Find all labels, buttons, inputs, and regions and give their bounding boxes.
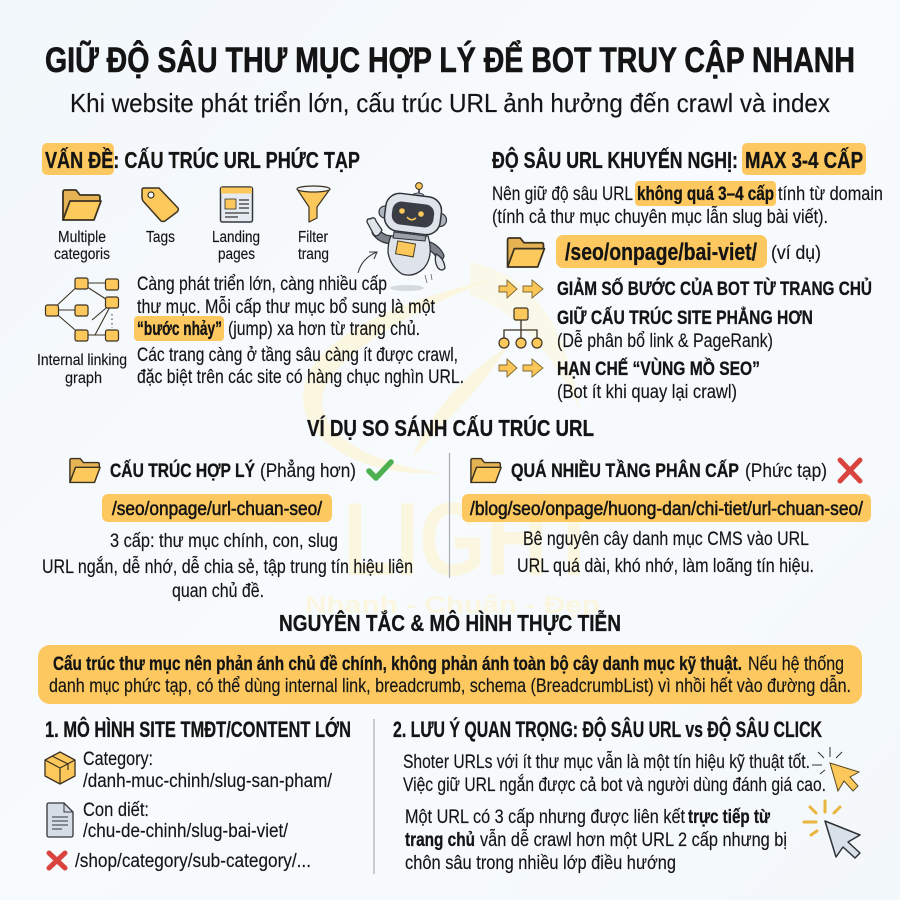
icon: folder good: [70, 459, 100, 482]
URL pill: bad: /blog/seo/onpage/huong-dan/chi-tiet/url-chuan-seo/: [470, 499, 864, 520]
text block: explanation: đặc biệt trên các site có hàng chục nghìn URL.: [137, 367, 464, 388]
URL pill: example: /seo/onpage/bai-viet/: [565, 239, 757, 266]
panel: mô hình site: [45, 717, 351, 872]
icon: cross: [49, 853, 65, 868]
watermark logo: [303, 262, 600, 619]
text: con diết: Con diết:: [83, 800, 149, 821]
label: tags: Tags: [146, 229, 175, 246]
text block: recommendation: (tính cả thư mục chuyên mục lẫn slug bài viết).: [492, 206, 828, 228]
text: con diết: /chu-de-chinh/slug-bai-viet/: [83, 821, 289, 842]
text block: good description: [42, 531, 413, 602]
heading: độ sâu: MAX 3-4 CẤP: [745, 146, 863, 173]
callout: principle: Nếu hệ thống: [748, 654, 844, 675]
text block: explanation: (jump) xa hơn từ trang chủ.: [228, 319, 420, 340]
heading: quá nhiều tầng phân cấp: QUÁ NHIỀU TẦNG PHÂN CẤP: [511, 460, 739, 482]
callout: principle: Cấu trúc thư mục nên phản ánh chủ đề chính, không phản ánh toàn bộ cây danh mục kỹ thuật.: [53, 654, 742, 675]
text: category: Category:: [83, 749, 153, 770]
icon: funnel: [297, 186, 330, 222]
text block: good description: 3 cấp: thư mục chính, con, slug: [110, 531, 338, 552]
icon: robot: [367, 183, 446, 291]
heading: độ sâu: [492, 143, 866, 175]
heading: vấn đề: [42, 143, 360, 175]
text block: bad description: [517, 529, 814, 577]
label: filter trang: Filter: [298, 229, 329, 246]
heading: nguyên tắc: NGUYÊN TẮC & MÔ HÌNH THỰC TIỄN: [279, 608, 621, 636]
text block: recommendation: tính từ domain: [778, 184, 883, 205]
heading: cấu trúc hợp lý: (Phẳng hơn): [260, 460, 356, 482]
URL pill: good: [102, 494, 332, 522]
panel: độ sâu URL khuyến nghị: [492, 143, 883, 403]
benefit 3: [557, 356, 760, 403]
text block: recommendation: Nên giữ độ sâu URL: [492, 184, 633, 205]
text block: click depth: chôn sâu trong nhiều lớp điều hướng: [405, 853, 676, 874]
text block: click depth: [405, 807, 787, 874]
label: internal linking graph: [37, 352, 127, 387]
heading: quá nhiều tầng phân cấp: (Phức tạp): [745, 461, 827, 482]
icon: document: [47, 803, 73, 837]
text block: shorter urls: Shoter URLs với ít thư mục vẫn là một tín hiệu kỹ thuật tốt.: [403, 751, 810, 773]
label: internal linking graph: graph: [65, 370, 102, 387]
label: filter trang: trang: [298, 246, 329, 263]
benefit 3: HẠN CHẾ “VÙNG MỒ SEO”: [557, 356, 760, 380]
label: multiple categoris: [54, 229, 110, 263]
text block: explanation: Càng phát triển lớn, càng nhiều cấp: [137, 274, 387, 295]
icon: arrows 2: [499, 359, 543, 377]
chart: internal linking graph: [46, 278, 118, 341]
text block: bad description: URL quá dài, khó nhớ, làm loãng tín hiệu.: [517, 556, 814, 577]
text: category: [83, 749, 333, 792]
text block: good description: URL ngắn, dễ nhớ, dễ chia sẻ, tập trung tín hiệu liên: [42, 556, 413, 578]
icon: folder bad: [471, 459, 501, 482]
URL pill: good: /seo/onpage/url-chuan-seo/: [112, 499, 323, 520]
text: category: /danh-muc-chinh/slug-san-pham/: [83, 771, 333, 792]
icon: arrows 1: [499, 280, 543, 298]
arrow: to robot: [358, 252, 377, 273]
icon: folder example: [508, 238, 544, 267]
icon: box: [45, 752, 75, 784]
panel: vấn đề: [37, 143, 464, 388]
text block: explanation: thư mục. Mỗi cấp thư mục bổ sung là một: [137, 296, 436, 318]
icon: tag: [142, 188, 178, 222]
text block: explanation: “bước nhảy”: [137, 319, 222, 340]
watermark logo: LIGHT: [343, 482, 600, 598]
label: landing pages: [212, 229, 260, 263]
URL pill: bad: [462, 494, 871, 522]
text block: explanation: Các trang càng ở tầng sâu càng ít được crawl,: [137, 345, 458, 366]
heading: vấn đề: VẤN ĐỀ: CẤU TRÚC URL PHỨC TẠP: [45, 146, 360, 173]
heading: cấu trúc hợp lý: [110, 460, 356, 482]
label: ví dụ: (ví dụ): [771, 243, 821, 264]
icon: hierarchy: [499, 308, 542, 348]
label: multiple categoris: categoris: [54, 246, 110, 263]
text block: explanation: [134, 274, 464, 388]
heading: so sánh: VÍ DỤ SO SÁNH CẤU TRÚC URL: [307, 414, 594, 441]
text block: recommendation: [492, 181, 883, 228]
icon: yellow cursor: [812, 747, 859, 791]
text block: bad description: Bê nguyên cây danh mục CMS vào URL: [523, 529, 809, 550]
label: landing pages: Landing: [212, 229, 260, 246]
label: multiple categoris: Multiple: [58, 229, 106, 246]
text block: click depth: trang chủ: [405, 830, 475, 851]
benefit 2: GIỮ CẤU TRÚC SITE PHẲNG HƠN: [557, 305, 813, 329]
heading: cấu trúc hợp lý: CẤU TRÚC HỢP LÝ: [110, 460, 255, 482]
text block: good description: quan chủ đề.: [172, 581, 264, 602]
subtitle: Khi website phát triển lớn, cấu trúc URL ảnh hưởng đến crawl và index: [70, 88, 830, 118]
icon: landing page: [220, 187, 252, 222]
text block: click depth: trực tiếp từ: [688, 807, 770, 828]
callout: principle: [38, 645, 862, 704]
label: internal linking graph: Internal linking: [37, 352, 127, 369]
icon: check: [369, 462, 391, 478]
label: landing pages: pages: [218, 246, 255, 263]
benefit 2: [557, 305, 813, 352]
text block: recommendation: không quá 3–4 cấp: [637, 184, 774, 205]
URL pill: example: [556, 235, 767, 268]
icon: cross: [840, 460, 860, 481]
icon: folder multiple categories: [63, 190, 101, 220]
panel: cấu trúc hợp lý: [42, 459, 413, 602]
icon: grey cursor: [804, 801, 860, 858]
text block: shorter urls: [403, 751, 826, 796]
label: filter trang: [298, 229, 329, 263]
benefit 3: (Bot ít khi quay lại crawl): [557, 382, 737, 403]
panel: lưu ý quan trọng: [393, 717, 860, 874]
text: con diết: [83, 800, 289, 842]
watermark logo: Nhanh - Chuẩn - Đẹp: [305, 592, 600, 619]
panel: quá nhiều tầng: [462, 459, 871, 577]
heading: độ sâu: ĐỘ SÂU URL KHUYẾN NGHỊ:: [492, 146, 738, 173]
text block: click depth: Một URL có 3 cấp nhưng được liên kết: [405, 807, 686, 828]
text: bad url: /shop/category/sub-category/...: [75, 851, 311, 872]
benefit 2: (Dễ phân bổ link & PageRank): [557, 330, 773, 352]
text block: click depth: vẫn dễ crawl hơn một URL 2 cấp nhưng bị: [480, 829, 787, 851]
heading: mô hình: 1. MÔ HÌNH SITE TMĐT/CONTENT LỚN: [45, 717, 351, 742]
